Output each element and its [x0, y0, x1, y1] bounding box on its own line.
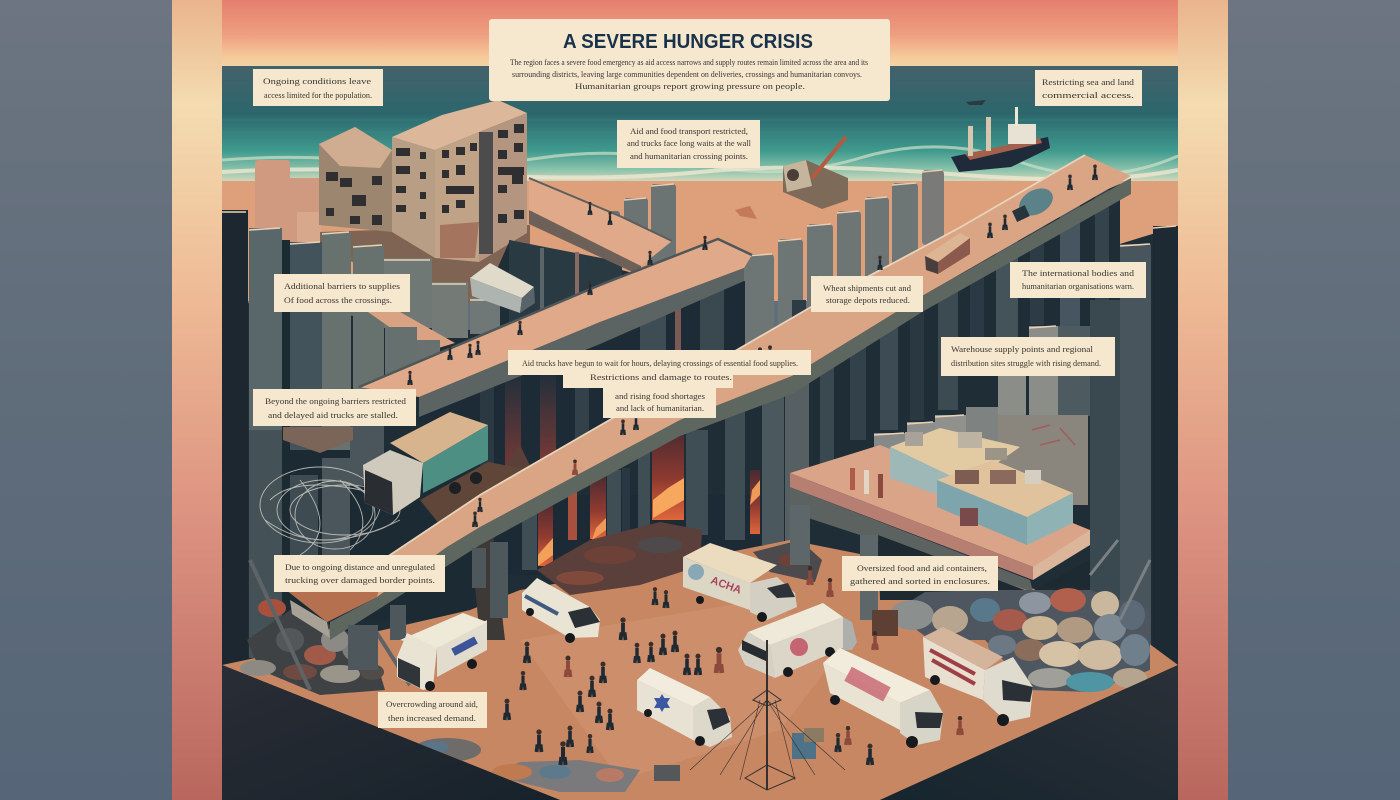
callout right upper [1010, 262, 1146, 298]
callout left upper [274, 274, 410, 312]
dark void under platform [878, 535, 1090, 610]
middle ramp [359, 239, 752, 417]
left rubble pile [240, 599, 385, 695]
callout upper ramp [811, 276, 923, 312]
intro text: surrounding districts, leaving large communities dependent on deliveries, crossings and humanitarian convoys. [512, 70, 862, 79]
truck on upper ramp [925, 233, 970, 274]
radio tower with guy wires [690, 640, 845, 790]
dark interior under the top ramps [509, 240, 622, 330]
slab walls along upper ramp [744, 170, 944, 349]
callout left upper: Of food across the crossings. [284, 296, 392, 305]
callout central stepped: Aid trucks have begun to wait for hours, delaying crossings of essential food supplies. [522, 359, 798, 368]
aid truck centre right [738, 603, 857, 678]
callout right upper: The international bodies and [1022, 269, 1134, 278]
back wall with fires [490, 430, 790, 575]
ground [222, 540, 1178, 800]
callout left middle [253, 389, 416, 426]
beach [222, 181, 1178, 301]
slab rim highlights [624, 170, 942, 256]
callout right middle [941, 337, 1115, 376]
callout top left [253, 69, 383, 106]
callout left middle: and delayed aid trucks are stalled. [268, 411, 398, 420]
sea [222, 66, 1178, 184]
top small ramp [529, 178, 672, 276]
left wall rim highlights [222, 212, 498, 300]
callout left middle: Beyond the ongoing barriers restricted [265, 397, 406, 406]
callout top left: Ongoing conditions leave [263, 77, 372, 86]
dark foreground right [880, 665, 1178, 800]
long main ramp [276, 155, 1131, 640]
white truck with star emblem [637, 668, 732, 747]
pillars under lower ramp [522, 380, 809, 570]
callout lower right [842, 556, 998, 591]
callout bottom left: Overcrowding around aid, [386, 700, 478, 709]
callout central stepped: Restrictions and damage to routes. [590, 373, 732, 382]
people on ramps [408, 165, 1097, 527]
cargo ship [951, 107, 1050, 172]
callout bottom left: then increased demand. [388, 714, 476, 723]
tanker on upper ramp [1012, 183, 1058, 222]
large teal aid truck [363, 412, 488, 515]
slab walls near top ramp [600, 184, 676, 264]
intro text: The region faces a severe food emergency as aid access narrows and supply routes remain limited across the area and its [510, 58, 868, 67]
rubble around big truck [420, 462, 530, 525]
callout top right [1035, 70, 1142, 106]
intro text: Humanitarian groups report growing pressure on people. [575, 82, 805, 91]
central bays between ramps [419, 280, 745, 520]
small van by the walls [470, 263, 535, 313]
right rubble sacks [872, 588, 1150, 692]
callout centre top [617, 120, 760, 168]
title: A SEVERE HUNGER CRISIS [563, 31, 813, 53]
beach mound [735, 206, 757, 219]
callout lower left: Due to ongoing distance and unregulated [285, 563, 435, 572]
small distant boat [966, 100, 986, 105]
left decorative strip [172, 0, 222, 800]
callout lower left: trucking over damaged border points. [285, 576, 435, 585]
callout central stepped [508, 350, 811, 418]
right decorative strip [1178, 0, 1228, 800]
right tall walls [874, 226, 1178, 674]
aid truck with logo and lettering [683, 543, 797, 622]
callout central stepped: and lack of humanitarian. [616, 404, 704, 413]
pit base [222, 184, 1178, 800]
callout bottom left [378, 692, 487, 728]
callout top right: commercial access. [1042, 91, 1134, 100]
damaged apartment blocks [319, 100, 527, 262]
right wall rim highlights [874, 226, 1176, 435]
callout right middle: distribution sites struggle with rising demand. [951, 359, 1101, 368]
crowd of people [504, 566, 962, 765]
intro text [510, 58, 868, 91]
crane truck on the beach [783, 137, 848, 209]
sky [222, 0, 1178, 68]
callout central stepped: and rising food shortages [615, 392, 705, 401]
callout centre top: and trucks face long waits at the wall [627, 139, 752, 148]
callout upper ramp: Wheat shipments cut and [823, 284, 911, 293]
distribution platform [790, 428, 1090, 592]
callout right middle: Warehouse supply points and regional [951, 345, 1094, 354]
aid truck with red stripes [923, 627, 1033, 726]
white van [522, 578, 600, 643]
graffiti wall panel [998, 415, 1088, 505]
callout lower right: Oversized food and aid containers, [857, 564, 987, 573]
dark foreground left [222, 665, 560, 800]
lower ramp supports [348, 542, 508, 670]
callout lower right: gathered and sorted in enclosures. [850, 577, 990, 586]
rubble behind walls [320, 225, 530, 305]
callout centre top: and humanitarian crossing points. [630, 152, 748, 161]
cartons beside tower [654, 728, 824, 781]
callout right upper: humanitarian organisations warn. [1022, 282, 1134, 291]
platform supports [790, 505, 878, 620]
dark bays lower left [283, 395, 480, 620]
callout top left: access limited for the population. [264, 91, 372, 100]
title panel [489, 19, 890, 101]
dark bays under upper ramp [792, 190, 1109, 480]
salmon outer walls [255, 160, 321, 252]
left concrete walls [222, 210, 500, 665]
central rubble [470, 445, 822, 640]
bracing struts [250, 560, 410, 690]
foreground rubble [413, 738, 640, 792]
barbed wire coil [260, 467, 400, 555]
aid truck with pink lettering [823, 648, 943, 748]
diagonal wall struts [1090, 540, 1150, 620]
white truck lower-left [397, 613, 487, 691]
callout upper ramp: storage depots reduced. [826, 296, 910, 305]
callout top right: Restricting sea and land [1042, 78, 1134, 87]
ground highlight [520, 600, 850, 780]
callout lower left [274, 555, 445, 592]
callout centre top: Aid and food transport restricted, [630, 127, 748, 136]
aid truck with logo and lettering: ACHA [709, 575, 743, 597]
callout left upper: Additional barriers to supplies [284, 282, 400, 291]
